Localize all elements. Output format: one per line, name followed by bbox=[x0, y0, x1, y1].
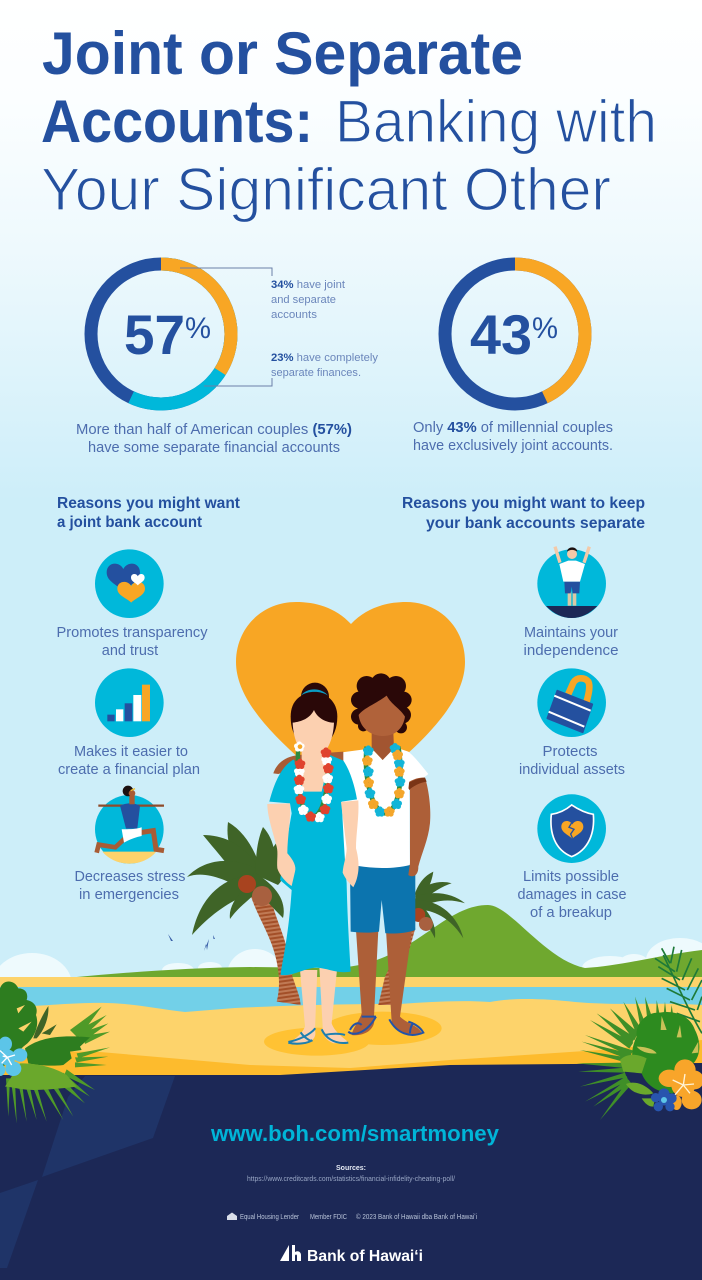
donut chart: 43 percent bbox=[445, 264, 585, 404]
heading: separate account reasons bbox=[402, 495, 645, 532]
donut chart: 43 percent: 43 bbox=[470, 303, 532, 366]
left palm fronds bbox=[187, 822, 290, 935]
palm leaflets bbox=[6, 1007, 110, 1123]
heading: joint account reasons: Reasons you might want bbox=[57, 495, 240, 512]
reason: transparency bbox=[56, 625, 208, 659]
ocean water bbox=[0, 987, 702, 1012]
reason: stress bbox=[74, 869, 186, 903]
clouds bbox=[0, 938, 702, 1017]
orange hibiscus bbox=[659, 1059, 702, 1110]
birds bbox=[168, 934, 215, 951]
blue hibiscus bbox=[0, 1037, 27, 1076]
icon: yoga pose bbox=[95, 786, 164, 864]
reason: financial plan bbox=[58, 744, 200, 778]
blue hibiscus bbox=[651, 1088, 677, 1111]
callout: 34 percent: accounts bbox=[271, 309, 318, 321]
reason: transparency: Promotes transparency bbox=[56, 625, 208, 641]
palm leaflets bbox=[577, 997, 673, 1120]
reason: independence: independence bbox=[524, 643, 618, 659]
icon: independent person bbox=[537, 547, 606, 618]
callout: 34 percent: and separate bbox=[271, 294, 336, 306]
caption: 43 percent bbox=[413, 419, 613, 454]
reason: assets bbox=[519, 744, 625, 778]
caption: 57 percent: have some separate financial accounts bbox=[88, 439, 340, 456]
reason: financial plan: create a financial plan bbox=[58, 762, 200, 778]
right palm tree bbox=[378, 872, 465, 1005]
reason: breakup: of a breakup bbox=[530, 905, 612, 921]
fan leaf bbox=[25, 1036, 90, 1066]
coconuts bbox=[238, 875, 272, 906]
reason: stress: in emergencies bbox=[79, 887, 179, 903]
logo: Bank of Hawaii: Bank of Hawaiʻi bbox=[307, 1248, 423, 1265]
reason: transparency: and trust bbox=[102, 643, 158, 659]
callout: 23 percent: 23% have completely bbox=[271, 352, 379, 364]
heading: joint account reasons: a joint bank account bbox=[57, 514, 202, 531]
man bbox=[273, 673, 430, 1035]
fern frond bbox=[655, 947, 702, 1033]
callout: 23 percent bbox=[271, 352, 379, 379]
couple illustration bbox=[264, 673, 442, 1056]
reason: breakup bbox=[518, 869, 626, 921]
caption: 43 percent: Only 43% of millennial couples bbox=[413, 419, 613, 436]
reason: independence bbox=[524, 625, 618, 659]
reason: assets: individual assets bbox=[519, 762, 625, 778]
sky background bbox=[0, 0, 702, 1000]
wet sand band bbox=[0, 1040, 702, 1078]
legal line: Equal Housing Lender bbox=[240, 1214, 300, 1221]
logo: Bank of Hawaii bbox=[280, 1245, 423, 1265]
legal line: © 2023 Bank of Hawaii dba Bank of Hawaiʻi bbox=[356, 1213, 477, 1221]
donut chart: 43 percent: % bbox=[532, 312, 558, 345]
donut chart: 57 percent bbox=[91, 264, 231, 404]
callout lines bbox=[180, 268, 272, 386]
caption: 57 percent bbox=[76, 421, 352, 456]
reason: breakup: Limits possible bbox=[523, 869, 619, 885]
beach sand bbox=[0, 977, 702, 1080]
right tropical plants bbox=[577, 947, 702, 1120]
reason: stress: Decreases stress bbox=[74, 869, 186, 885]
title bbox=[41, 20, 657, 223]
icon: hearts bbox=[95, 549, 164, 618]
woman's lei bbox=[294, 741, 334, 822]
woman bbox=[267, 683, 359, 1044]
reason: financial plan: Makes it easier to bbox=[74, 744, 188, 760]
light leaves bbox=[620, 1055, 655, 1107]
footer facets bbox=[0, 1076, 175, 1268]
sources bbox=[247, 1165, 455, 1183]
monstera leaf bbox=[0, 981, 37, 1070]
legal line: Member FDIC bbox=[310, 1214, 347, 1221]
sources: Sources: bbox=[336, 1165, 366, 1172]
title: Your Significant Other bbox=[41, 156, 611, 223]
callout: 34 percent bbox=[271, 279, 345, 321]
left palm tree bbox=[250, 893, 301, 1005]
icon: padlock bbox=[537, 668, 606, 737]
title: Banking with bbox=[335, 88, 657, 155]
reason: assets: Protects bbox=[542, 744, 598, 760]
website url: www.boh.com/smartmoney bbox=[210, 1121, 500, 1146]
callout: 34 percent: 34% have joint bbox=[271, 279, 345, 291]
icon: equal housing bbox=[227, 1212, 237, 1220]
navy footer band bbox=[0, 1063, 702, 1280]
man's lei bbox=[362, 743, 405, 817]
caption: 57 percent: More than half of American couples (57%) bbox=[76, 421, 352, 438]
light leaf bbox=[5, 1063, 77, 1090]
heading: separate account reasons: your bank accounts separate bbox=[426, 515, 645, 532]
reason: independence: Maintains your bbox=[524, 625, 618, 641]
icon: shield with broken heart bbox=[537, 794, 606, 863]
caption: 43 percent: have exclusively joint accounts. bbox=[413, 437, 613, 454]
icon: growth bars bbox=[95, 668, 164, 737]
sand shadows bbox=[264, 1012, 442, 1056]
green hills bbox=[0, 905, 702, 990]
left tropical plants bbox=[0, 981, 110, 1123]
title: Accounts: bbox=[41, 88, 313, 155]
heading: separate account reasons: Reasons you might want to keep bbox=[402, 495, 645, 512]
sources: https://www.creditcards.com/statistics/financial-infidelity-cheating-poll/ bbox=[247, 1176, 455, 1183]
monstera leaf bbox=[632, 1012, 699, 1093]
legal line bbox=[240, 1213, 477, 1221]
heading: joint account reasons bbox=[57, 495, 240, 531]
donut chart: 57 percent: % bbox=[185, 312, 211, 345]
reason: breakup: damages in case bbox=[518, 887, 626, 903]
title: Joint or Separate bbox=[42, 20, 523, 87]
donut chart: 57 percent: 57 bbox=[124, 303, 185, 366]
callout: 23 percent: separate finances. bbox=[271, 367, 361, 379]
big orange heart bbox=[236, 602, 465, 800]
